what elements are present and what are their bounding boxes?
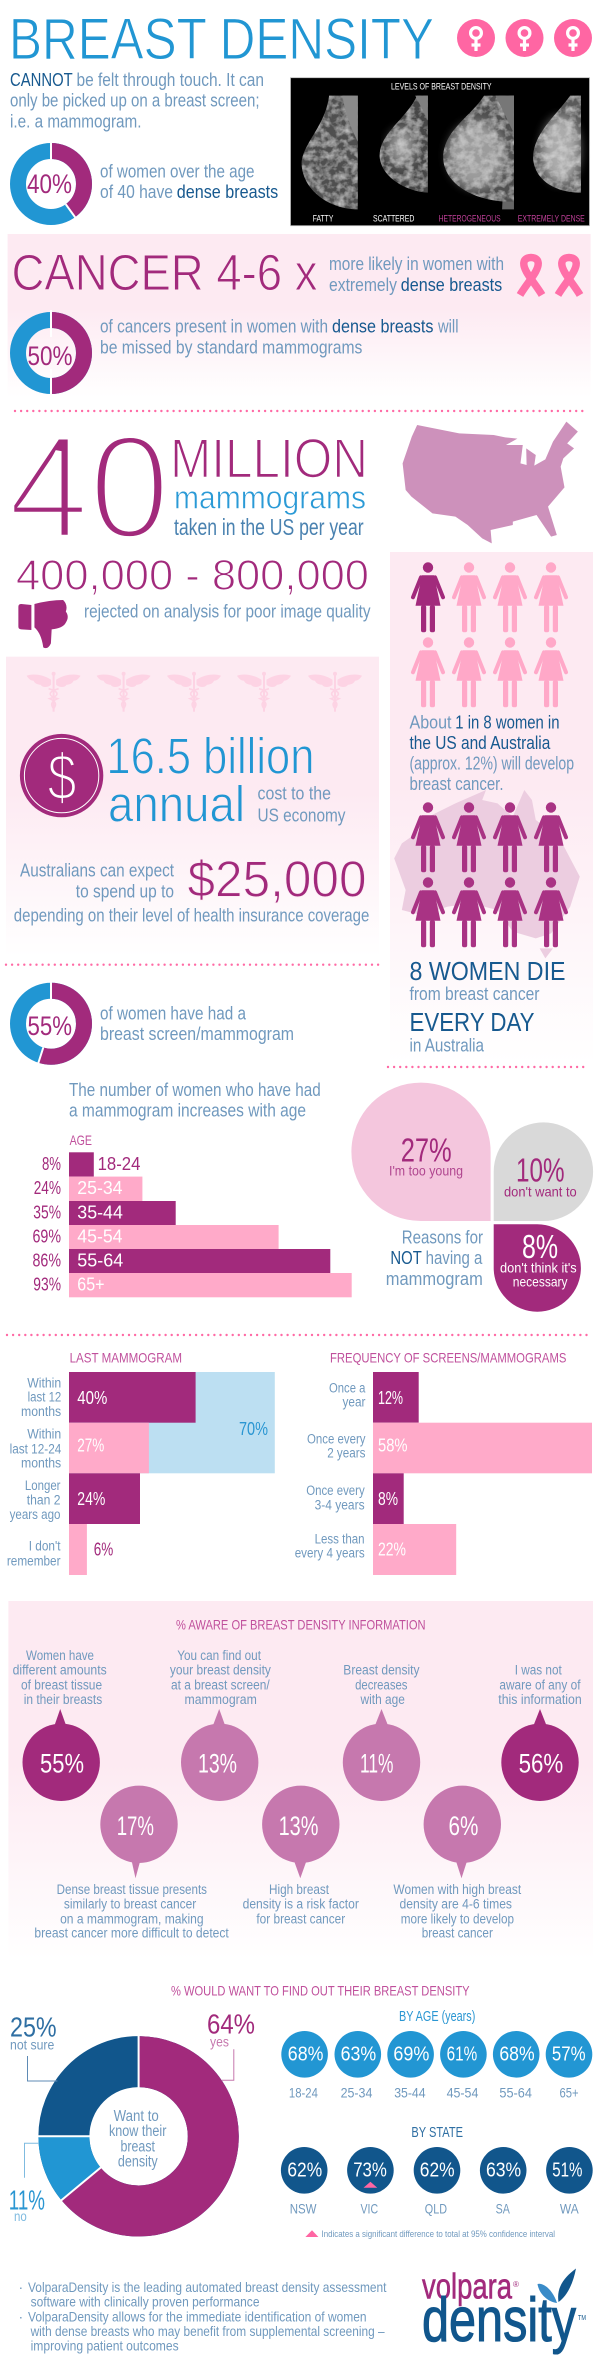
chart: last mammogram: Longer [25, 1478, 61, 1493]
bubble: 13 percent risk factor [243, 1786, 359, 1926]
bubble: not necessary: necessary [513, 1274, 568, 1290]
bubble: 13 percent risk factor: for breast cancer [256, 1911, 346, 1926]
panel: women statistics [390, 552, 593, 1063]
image: levels of breast density [290, 78, 590, 226]
donut: 50 percent: 50% [28, 341, 72, 371]
by state circles: 73% [353, 2159, 387, 2181]
by age circles: 55-64 [499, 2085, 532, 2101]
bubble: 13 percent find out: at a breast screen/ [171, 1677, 270, 1692]
bubble: 17 percent presents similarly: similarly to breast cancer [64, 1897, 197, 1912]
stat: 16.5 billion annual: cost to the [258, 783, 331, 803]
chart: frequency of screens: 2 years [327, 1446, 366, 1461]
bubble: 11 percent decreases with age [343, 1663, 420, 1801]
stat: 25,000 dollars [14, 851, 369, 926]
callout: 11 percent no [9, 2143, 45, 2224]
text: bullet points: VolparaDensity allows for the immediate identification of women [28, 2308, 367, 2324]
bubble: 17 percent presents similarly: 17% [117, 1811, 154, 1841]
bubble: 11 percent decreases with age: 11% [360, 1748, 393, 1778]
icon group: 8 women [413, 802, 566, 947]
donut centre label: density [118, 2154, 158, 2171]
callout: 64 percent yes [207, 2008, 255, 2080]
donut: 50 percent [18, 310, 84, 396]
text: more likely: extremely [329, 274, 398, 295]
donut centre label: know their [109, 2123, 166, 2140]
chart: frequency of screens: Once a [329, 1380, 366, 1395]
icon: thumbs down [18, 600, 68, 648]
text: 8 women die: from breast cancer [410, 983, 540, 1004]
number: rejected range: 400,000 - 800,000 [16, 551, 369, 599]
chart: last mammogram: months [21, 1456, 61, 1471]
text: more likely: more likely in women with [329, 253, 504, 274]
bubble: 6 percent more likely: breast cancer [422, 1926, 493, 1941]
bubble: 6 percent more likely [393, 1786, 521, 1941]
bubble: too young: I'm too young [389, 1163, 463, 1179]
bubble: not necessary [494, 1224, 581, 1312]
big number: 40 million [8, 406, 368, 570]
text: women over 40: of women over the age [100, 160, 254, 181]
image: levels of breast density: HETEROGENEOUS [439, 213, 501, 223]
text: 1 in 8: About [410, 711, 452, 732]
bar chart: mammogram by age: AGE [70, 1132, 92, 1148]
by age circles: 61% [447, 2044, 477, 2066]
image: levels of breast density: FATTY [313, 213, 333, 223]
icon: female symbols [457, 19, 592, 57]
chart: frequency of screens: 12% [378, 1388, 403, 1408]
heading: cancer 4-6 x: CANCER 4-6 x [12, 244, 318, 301]
icon: dollar coin [20, 734, 103, 817]
chart: last mammogram: Within [27, 1376, 61, 1391]
chart: frequency of screens: Once every [307, 1431, 366, 1446]
donut: 55 percent [18, 980, 84, 1064]
bubble: 13 percent risk factor: 13% [279, 1811, 318, 1841]
text: 1 in 8: the US and Australia [410, 732, 551, 753]
chart: last mammogram: I don't [29, 1539, 61, 1554]
stat: 16.5 billion annual: annual [108, 776, 245, 833]
stat: 25,000 dollars: $25,000 [188, 851, 366, 908]
bar chart: mammogram by age: 45-54 [77, 1227, 122, 1247]
chart: frequency of screens: every 4 years [295, 1546, 365, 1561]
by age circles: 35-44 [394, 2085, 426, 2101]
stat: 16.5 billion annual: US economy [258, 806, 346, 826]
text: reasons for not having: mammogram [386, 1268, 483, 1289]
bubble: don't want to: don't want to [504, 1184, 577, 1200]
bubble: 13 percent risk factor: density is a risk factor [243, 1897, 359, 1912]
bar chart: mammogram by age: 35-44 [77, 1202, 123, 1222]
by age circles: 65+ [560, 2085, 579, 2101]
bar chart: mammogram by age [32, 1132, 352, 1297]
by state circles: WA [560, 2200, 579, 2216]
text: 1 in 8 [410, 711, 574, 794]
intro text: only be picked up on a breast screen; [10, 90, 260, 111]
bar chart: mammogram by age: 69% [32, 1227, 61, 1247]
panel: economic cost [6, 657, 379, 957]
map: Australia [394, 790, 580, 958]
bubble: 55 percent different amounts: Women have [26, 1648, 94, 1663]
stat: 16.5 billion annual: 16.5 billion [106, 727, 314, 784]
text: more likely [329, 253, 504, 295]
chart: last mammogram: last 12 [28, 1390, 61, 1405]
bubble: 6 percent more likely: 6% [448, 1811, 478, 1841]
stat: 25,000 dollars: to spend up to [76, 881, 174, 902]
text: cancers missed: will [437, 316, 458, 337]
bar chart: mammogram by age: 65+ [77, 1275, 104, 1295]
by state circles: 63% [486, 2159, 521, 2181]
by state circles: NSW [290, 2200, 317, 2216]
text: bullet points: software with clinically proven performance [31, 2294, 260, 2310]
by age circles: 69% [393, 2044, 430, 2066]
bubble: 6 percent more likely: more likely to develop [401, 1911, 514, 1926]
heading: increases with age [69, 1079, 321, 1121]
bar chart: mammogram by age: 55-64 [77, 1251, 123, 1271]
by age circles [281, 2008, 592, 2101]
bubble: 11 percent decreases with age: Breast density [343, 1663, 420, 1678]
bubble: 17 percent presents similarly [34, 1786, 229, 1941]
by age circles: BY AGE (years) [399, 2008, 475, 2025]
text: more likely: dense breasts [401, 274, 502, 295]
text: cancers missed [100, 316, 458, 357]
bubble: 17 percent presents similarly: breast cancer more difficult to detect [34, 1926, 229, 1941]
heading: would want to find out: % WOULD WANT TO FIND OUT THEIR BREAST DENSITY [171, 1982, 470, 1998]
bubble: 17 percent presents similarly: on a mammogram, making [60, 1911, 204, 1926]
bubble: 56 percent not aware [498, 1663, 582, 1801]
panel: cancer risk [8, 234, 591, 397]
text: bullet points: VolparaDensity is the leading automated breast density assessment [28, 2279, 387, 2295]
callout: 64 percent yes: 64% [207, 2008, 255, 2039]
bubble: 13 percent find out [170, 1648, 271, 1801]
big number: 40 million: mammograms [174, 479, 366, 515]
by state circles [281, 2124, 593, 2216]
chart: last mammogram: 40% [77, 1388, 107, 1408]
heading: increases with age: a mammogram increases with age [69, 1100, 306, 1121]
callout: 25 percent not sure [10, 2012, 57, 2081]
text: 8 women die: EVERY DAY [410, 1007, 534, 1037]
bubble: don't want to [494, 1122, 593, 1221]
donut: 55 percent: 55% [28, 1011, 72, 1041]
bubble: 55 percent different amounts: 55% [40, 1748, 84, 1778]
bubble: not necessary: don't think it's [500, 1260, 577, 1276]
image: levels of breast density: LEVELS OF BREAST DENSITY [391, 81, 492, 91]
bubble: 13 percent find out: your breast density [170, 1663, 271, 1678]
bubble: 13 percent find out: mammogram [184, 1692, 257, 1707]
bubble: 56 percent not aware: I was not [515, 1663, 562, 1678]
map: United States [403, 422, 578, 543]
donut chart: want to know [37, 2035, 213, 2211]
text: had a mammogram [100, 1002, 294, 1044]
bubble: too young [351, 1083, 491, 1221]
icon: dollar coin: $ [48, 740, 76, 814]
bar chart: mammogram by age: 25-34 [77, 1178, 122, 1198]
logo: volpara density: ® [513, 2280, 519, 2289]
bubble: 13 percent find out: 13% [198, 1748, 237, 1778]
panel: awareness of breast density [8, 1601, 593, 1960]
bar chart: mammogram by age: 18-24 [98, 1154, 140, 1174]
by age circles: 68% [288, 2044, 324, 2066]
chart: last mammogram: Within [27, 1427, 61, 1442]
stat: 25,000 dollars: depending on their level of health insurance coverage [14, 905, 369, 926]
text: cancers missed: dense breasts [332, 316, 433, 337]
chart: last mammogram: LAST MAMMOGRAM [70, 1350, 182, 1366]
text: reasons for not having: Reasons for [402, 1226, 483, 1247]
text: bullet points: · [18, 2308, 23, 2324]
text: women over 40 [100, 160, 278, 202]
icon: ribbons [520, 258, 580, 295]
bar chart: mammogram by age: 86% [32, 1251, 61, 1271]
big number: 40 million: taken in the US per year [174, 514, 364, 540]
stat: 16.5 billion annual [106, 727, 346, 833]
by state circles: 62% [420, 2159, 455, 2181]
by state circles: QLD [425, 2200, 447, 2216]
icon group: caduceus [27, 672, 362, 712]
donut: 40 percent: 40% [27, 169, 72, 199]
image: levels of breast density: SCATTERED [373, 213, 415, 223]
by state circles: SA [496, 2200, 510, 2216]
text: had a mammogram: of women have had a [100, 1002, 247, 1023]
bubble: 55 percent different amounts [13, 1648, 107, 1801]
text: 8 women die: 8 WOMEN DIE [410, 956, 566, 986]
by state circles: 51% [552, 2159, 583, 2181]
text: rejected: rejected on analysis for poor image quality [84, 601, 370, 621]
text: 1 in 8: 1 in 8 women in [455, 711, 560, 732]
text: women over 40: of 40 have [100, 181, 173, 202]
text: bullet points: improving patient outcomes [31, 2337, 179, 2353]
logo: volpara density: TM [578, 2315, 586, 2322]
text: bullet points: with dense breasts who may benefit from supplemental screening – [30, 2323, 385, 2339]
chart: last mammogram: 6% [94, 1540, 113, 1560]
callout: 11 percent no: 11% [9, 2184, 45, 2215]
chart: frequency of screens: year [342, 1395, 366, 1410]
bubble: 17 percent presents similarly: Dense breast tissue presents [57, 1882, 207, 1897]
bar chart: mammogram by age: 35% [33, 1202, 61, 1222]
big number: 40 million: 40 [8, 406, 170, 570]
callout: 11 percent no: no [14, 2209, 27, 2224]
bubble: don't want to: 10% [516, 1152, 564, 1189]
bubble: 6 percent more likely: Women with high breast [393, 1882, 521, 1897]
big number: 40 million: MILLION [170, 426, 368, 489]
text: cancers missed: be missed by standard mammograms [100, 336, 362, 357]
intro text: i.e. a mammogram. [10, 111, 142, 132]
text: 8 women die [410, 956, 566, 1056]
chart: last mammogram [7, 1350, 275, 1575]
text: had a mammogram: breast screen/mammogram [100, 1023, 294, 1044]
text: reasons for not having: having a [426, 1247, 483, 1268]
chart: frequency of screens: 3-4 years [315, 1497, 365, 1512]
by state circles: VIC [360, 2200, 378, 2216]
by age circles: 18-24 [289, 2085, 318, 2101]
by age circles: 45-54 [447, 2085, 479, 2101]
chart: frequency of screens: Once every [306, 1483, 365, 1498]
text: women over 40: dense breasts [177, 181, 278, 202]
bubble: 11 percent decreases with age: decreases [355, 1677, 408, 1692]
donut centre label: Want to [114, 2108, 159, 2125]
chart: frequency of screens [295, 1350, 592, 1575]
chart: last mammogram: months [21, 1404, 61, 1419]
text: reasons for not having: NOT [390, 1247, 422, 1268]
by age circles: 68% [499, 2044, 535, 2066]
by age circles: 25-34 [341, 2085, 373, 2101]
by age circles: 63% [341, 2044, 376, 2066]
chart: last mammogram: 70% [239, 1419, 268, 1439]
bar chart: mammogram by age: 93% [33, 1275, 61, 1295]
chart: last mammogram: remember [7, 1553, 61, 1568]
callout: 25 percent not sure: 25% [10, 2012, 57, 2043]
bubble: 13 percent find out: You can find out [177, 1648, 261, 1663]
bubble: not necessary: 8% [522, 1228, 558, 1265]
donut centre label: breast [120, 2138, 156, 2155]
legend: significance note: Indicates a significant difference to total at 95% confidence interval [322, 2229, 555, 2240]
callout: 25 percent not sure: not sure [10, 2037, 54, 2052]
by age circles: 57% [552, 2044, 586, 2066]
donut centre label [109, 2108, 166, 2171]
bubble: 11 percent decreases with age: with age [360, 1692, 405, 1707]
text: cancers missed: of cancers present in women with [100, 316, 328, 337]
bubble: 6 percent more likely: density are 4-6 times [400, 1897, 512, 1912]
bubble: 55 percent different amounts: different amounts [13, 1663, 107, 1678]
bubble: 56 percent not aware: aware of any of [499, 1677, 581, 1692]
text: bullet points [18, 2279, 387, 2353]
by state circles: BY STATE [411, 2124, 463, 2141]
chart: frequency of screens: 22% [378, 1540, 406, 1560]
intro text: CANNOT [10, 69, 73, 90]
chart: last mammogram: 24% [77, 1489, 105, 1509]
callout: 64 percent yes: yes [210, 2035, 229, 2050]
bar chart: mammogram by age: 24% [34, 1178, 61, 1198]
by state circles: 62% [287, 2159, 322, 2181]
donut: 40 percent [18, 141, 84, 218]
chart: last mammogram: 27% [77, 1436, 104, 1456]
text: 8 women die: in Australia [410, 1035, 485, 1056]
chart: frequency of screens: 58% [378, 1436, 408, 1456]
heading: percent aware: % AWARE OF BREAST DENSITY INFORMATION [176, 1616, 426, 1632]
chart: frequency of screens: Less than [315, 1531, 365, 1546]
chart: frequency of screens: 8% [378, 1489, 398, 1509]
logo: volpara density: volpara [422, 2266, 513, 2307]
text: 1 in 8: breast cancer. [410, 773, 504, 794]
bubble: 55 percent different amounts: in their breasts [24, 1692, 102, 1707]
heading: increases with age: The number of women who have had [69, 1079, 321, 1100]
intro text [10, 69, 264, 132]
intro text: be felt through touch. It can [76, 69, 264, 90]
chart: last mammogram: years ago [10, 1507, 61, 1522]
icon group: 1 in 8 women [413, 562, 566, 707]
text: bullet points: · [18, 2279, 23, 2295]
bar chart: mammogram by age: 8% [42, 1154, 61, 1174]
text: reasons for not having [386, 1226, 483, 1289]
chart: last mammogram: last 12-24 [10, 1441, 62, 1456]
chart: last mammogram: than 2 [27, 1492, 60, 1507]
bubble: 56 percent not aware: this information [498, 1692, 582, 1707]
bubble: 55 percent different amounts: of breast tissue [21, 1677, 102, 1692]
bubble: too young: 27% [401, 1132, 452, 1169]
title: BREAST DENSITY [9, 7, 434, 72]
bubble: 56 percent not aware: 56% [519, 1748, 563, 1778]
stat: 25,000 dollars: Australians can expect [20, 860, 174, 881]
bubble: 13 percent risk factor: High breast [269, 1882, 329, 1897]
